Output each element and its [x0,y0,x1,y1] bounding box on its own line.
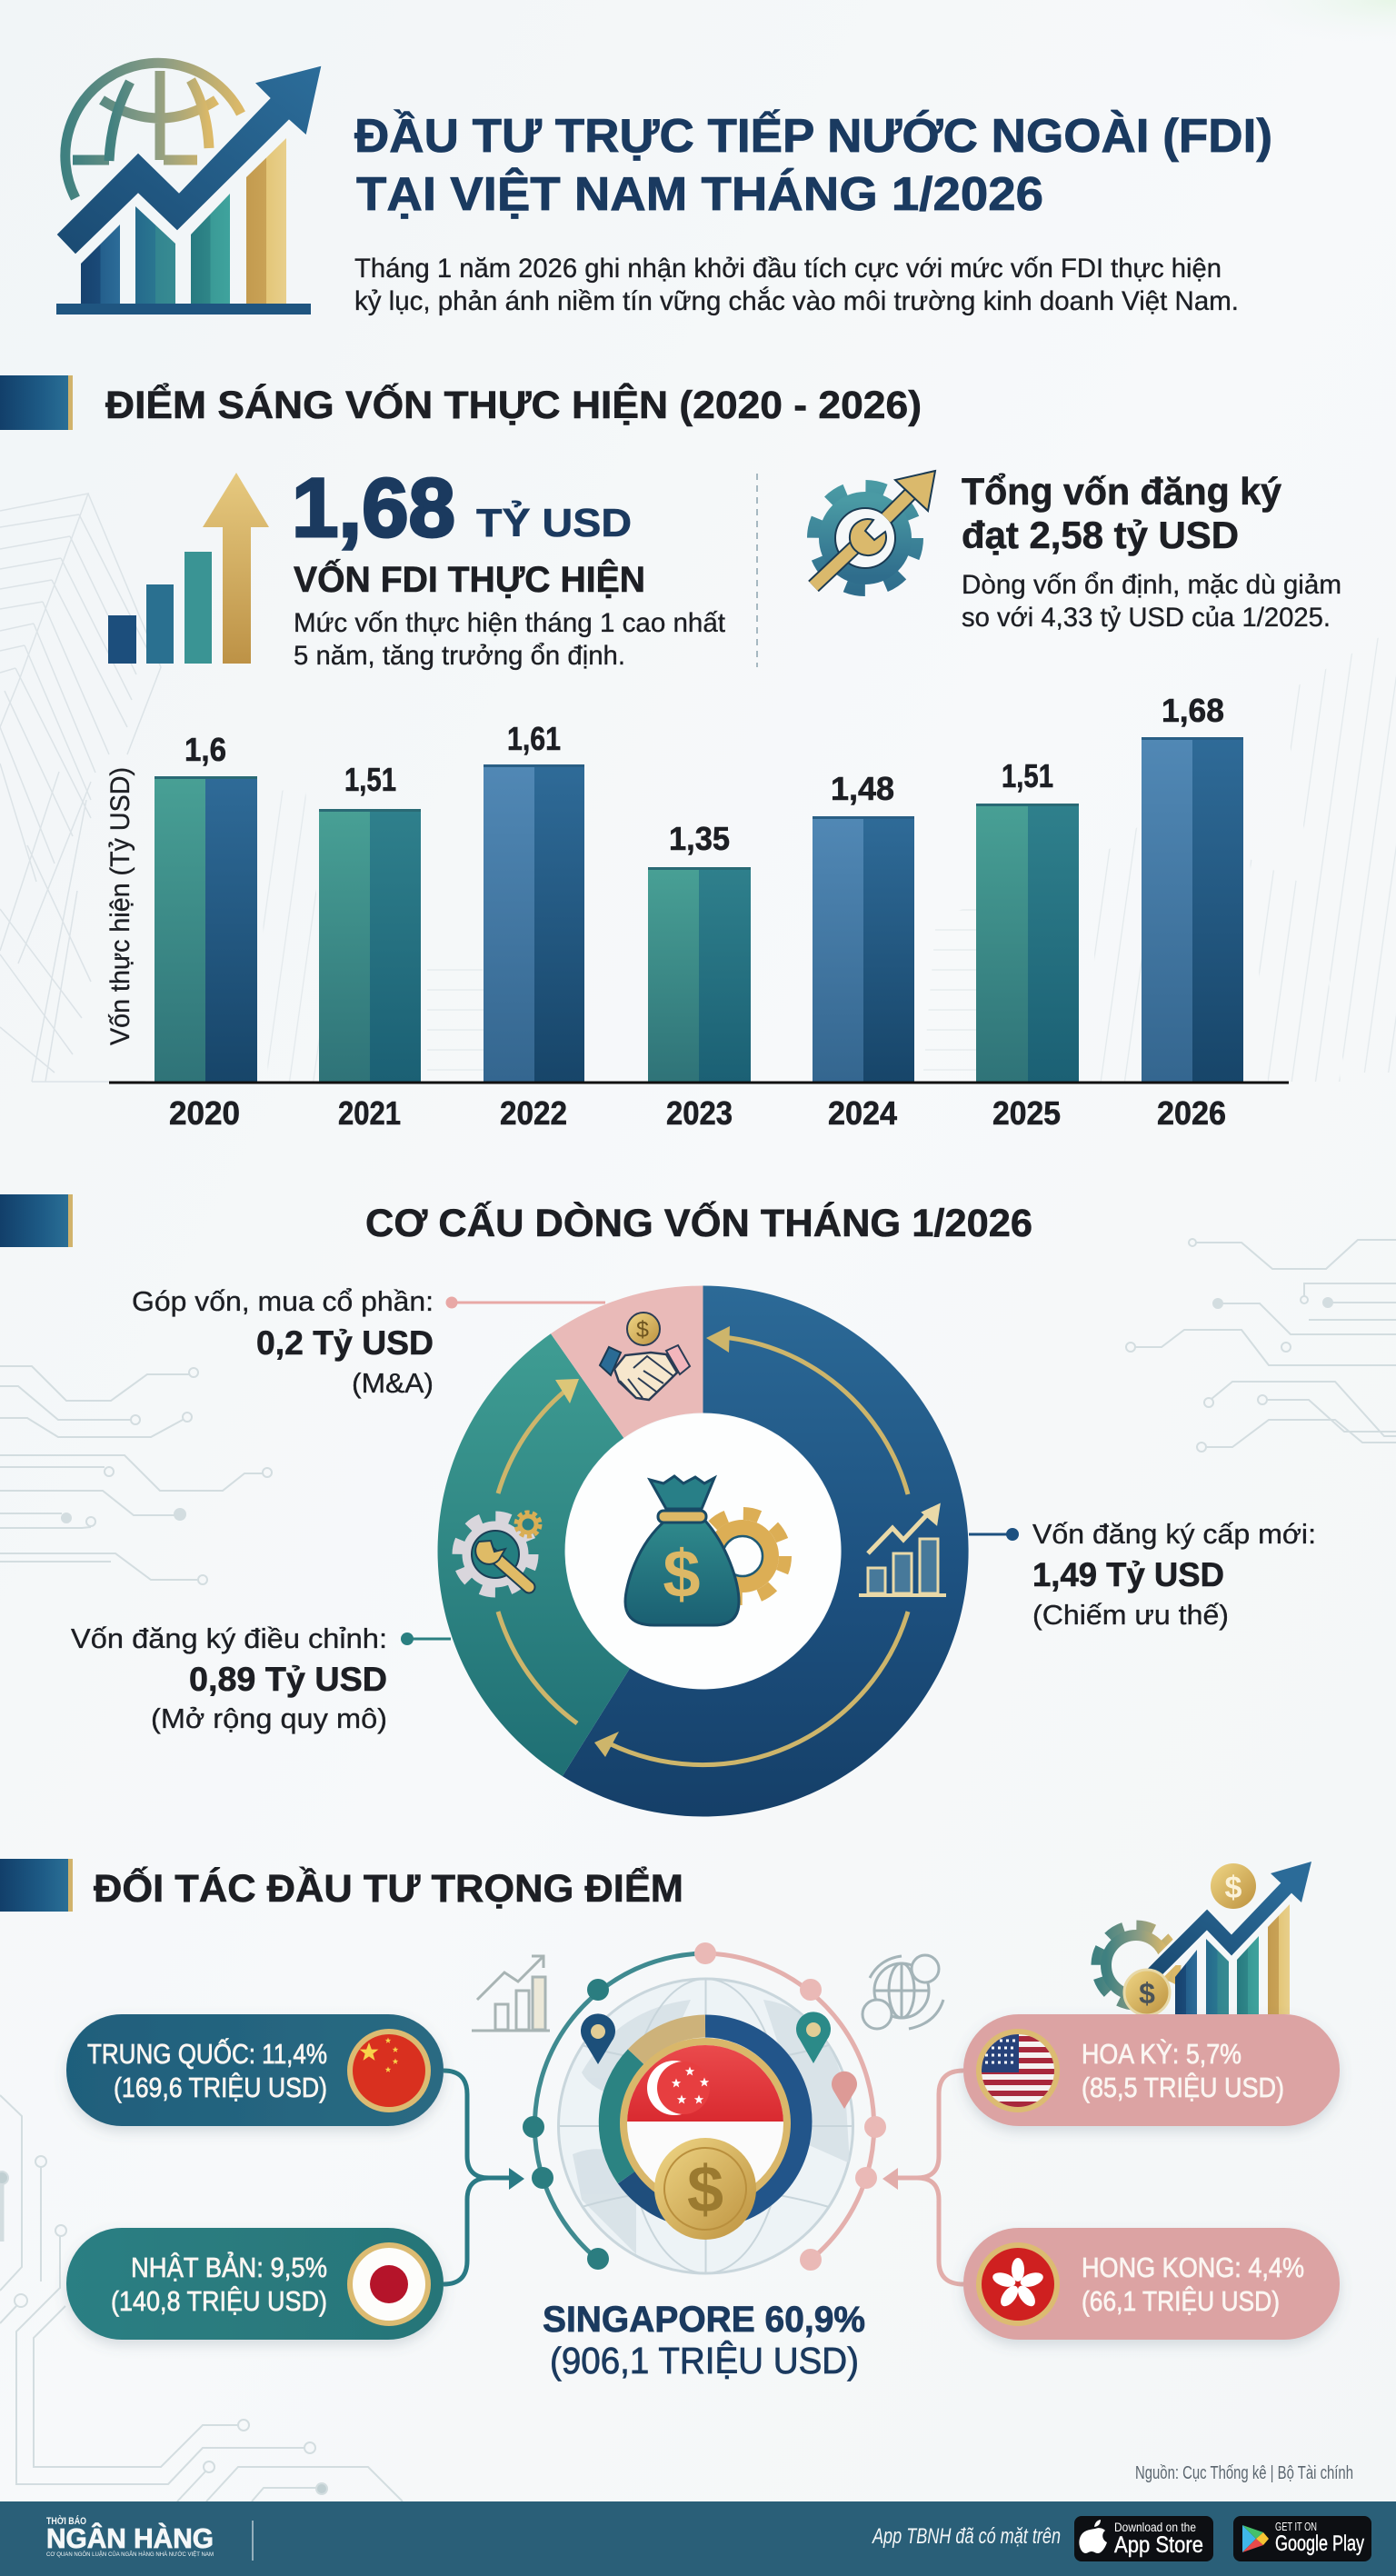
callout: M&A: (M&A) [352,1367,434,1399]
decoration: circuit lines [0,1239,1396,2501]
footer app text: App TBNH đã có mặt trên [871,2524,1061,2549]
icon: growth chart [859,1505,946,1595]
badge: Google Play [1233,2516,1371,2561]
badge: Google Play: GET IT ON [1275,2520,1317,2533]
value labels: 1,48 [831,770,894,807]
segment: adjusted capital [438,1333,630,1776]
heading: section 1: ĐIỂM SÁNG VỐN THỰC HIỆN (2020 - 2026) [105,383,922,427]
partner: Hong Kong [963,2228,1340,2340]
callout: adjusted capital: 0,89 Tỷ USD [189,1661,387,1698]
icon: small globe with coins [863,1955,943,2029]
badge: App Store: Download on the [1114,2520,1196,2534]
kpi: realised capital [292,462,726,671]
section marker 1 [0,375,73,430]
bar 2021 [319,809,421,1083]
value labels: 1,6 [184,731,226,768]
value labels [184,692,1224,857]
callout: new registered capital [969,1518,1316,1631]
kpi: realised capital: 1,68 [292,462,455,554]
badge: Google Play: Google Play [1275,2531,1364,2556]
icon: growth chart with gear and coins: $ [1139,1977,1155,2010]
value labels: 1,35 [669,820,730,857]
intro text: Tháng 1 năm 2026 ghi nhận khởi đầu tích cực với mức vốn FDI thực hiện [354,254,1222,284]
footer bar [0,2501,1396,2576]
corner tint [0,0,1396,364]
footer divider [252,2521,254,2561]
year labels: 2024 [828,1094,897,1132]
year labels: 2022 [500,1094,567,1132]
badge: App Store [1074,2516,1213,2561]
callout: M&A [132,1285,605,1399]
partner: Hong Kong: HONG KONG: 4,4% [1082,2252,1304,2283]
kpi: realised capital: Mức vốn thực hiện tháng 1 cao nhất [294,608,726,638]
x axis [109,1082,1289,1083]
header logo icon [56,63,322,315]
year labels: 2021 [338,1094,401,1132]
donut ring around flag [610,2026,801,2217]
kpi divider [756,474,758,667]
icon: money bag and gear [625,1476,785,1625]
decoration: building line art [0,494,1396,1082]
title [354,109,1272,221]
footer logo: CƠ QUAN NGÔN LUẬN CỦA NGÂN HÀNG NHÀ NƯỚC VIỆT NAM [46,2550,214,2558]
bar 2025 [976,804,1079,1083]
icon: gears and wrench [458,1513,540,1592]
segment: M&A [551,1285,703,1438]
year labels: 2025 [992,1094,1061,1132]
callout: adjusted capital: Vốn đăng ký điều chỉnh: [71,1622,387,1654]
partner: China [66,2014,444,2126]
callout: adjusted capital: (Mở rộng quy mô) [151,1702,387,1734]
partner: United States [963,2014,1340,2126]
icon: small chart [472,1956,550,2031]
value labels: 1,61 [507,720,561,757]
gold coin [654,2138,756,2240]
icon: growth arrow [56,65,322,255]
bar 2026 [1142,737,1243,1083]
bar 2023 [648,867,751,1083]
label: Singapore: SINGAPORE 60,9% [543,2300,865,2340]
callout: new registered capital: 1,49 Tỷ USD [1032,1556,1224,1593]
icon: handshake with coin [600,1313,690,1400]
value labels: 1,68 [1162,692,1224,729]
kpi icon: bars and arrow [108,473,269,664]
flow arrows [498,1326,908,1765]
callout: new registered capital: (Chiếm ưu thế) [1032,1599,1229,1631]
partner: Japan: NHẬT BẢN: 9,5% [131,2252,327,2283]
year labels: 2026 [1157,1094,1226,1132]
value labels: 1,51 [1002,757,1053,794]
value labels: 1,51 [344,761,396,798]
bar 2020 [155,776,257,1083]
connector: left partners [444,2071,524,2284]
partner: Hong Kong: (66,1 TRIỆU USD) [1082,2285,1280,2317]
callout: adjusted capital [71,1622,451,1734]
section marker 2 [0,1194,73,1247]
donut chart: capital structure [438,1285,969,1816]
heading: section 3: ĐỐI TÁC ĐẦU TƯ TRỌNG ĐIỂM [94,1866,683,1911]
map pins [581,2012,857,2109]
kpi: realised capital: VỐN FDI THỰC HIỆN [294,558,645,600]
orbit with nodes [523,1942,886,2271]
partner: Japan: (140,8 TRIỆU USD) [111,2285,327,2317]
icon: gear with wrench and arrow [813,471,935,590]
section marker 3 [0,1859,73,1912]
callout: new registered capital: Vốn đăng ký cấp mới: [1032,1518,1316,1550]
kpi: registered capital: Dòng vốn ổn định, mặc dù giảm [962,570,1341,600]
central globe [558,1979,853,2273]
kpi: realised capital: TỶ USD [476,500,632,545]
intro text: kỷ lục, phản ánh niềm tín vững chắc vào môi trường kinh doanh Việt Nam. [354,286,1239,316]
y axis label: Vốn thực hiện (Tỷ USD) [105,767,135,1045]
icon: growth chart with gear and coins: $ [1225,1871,1242,1905]
year labels [169,1094,1226,1132]
Singapore flag [620,2038,791,2209]
icon: money bag and gear: $ [663,1536,701,1612]
bar 2024 [813,816,914,1083]
partner: China: (169,6 TRIỆU USD) [114,2072,327,2103]
year labels: 2020 [169,1094,240,1132]
label: Singapore [543,2300,865,2381]
icon: globe [65,63,241,198]
footer logo: NGÂN HÀNG [46,2521,214,2554]
year labels: 2023 [666,1094,733,1132]
intro text [354,254,1239,316]
icon: rising bars [56,138,311,315]
callout: M&A: 0,2 Tỷ USD [256,1324,434,1362]
title: TẠI VIỆT NAM THÁNG 1/2026 [356,167,1043,221]
connector: right partners [882,2071,963,2284]
bar 2022 [484,764,584,1083]
footer logo: THỜI BÁO [46,2515,86,2527]
kpi: realised capital: 5 năm, tăng trưởng ổn định. [294,641,625,671]
kpi: registered capital: đạt 2,58 tỷ USD [962,514,1239,556]
gold coin: $ [687,2153,723,2226]
kpi: registered capital: so với 4,33 tỷ USD của 1/2025. [962,603,1331,633]
kpi: registered capital [962,470,1341,633]
partner: United States: (85,5 TRIỆU USD) [1082,2072,1284,2103]
icon: growth chart with gear and coins [1098,1862,1311,2015]
callout: M&A: Góp vốn, mua cổ phần: [132,1285,434,1317]
partner: China: TRUNG QUỐC: 11,4% [87,2037,327,2070]
kpi: registered capital: Tổng vốn đăng ký [962,470,1282,513]
label: Singapore: (906,1 TRIỆU USD) [550,2340,859,2381]
center hole [565,1414,840,1689]
bar chart: realised FDI 2020-2026 [105,692,1289,1132]
icon: handshake with coin: $ [636,1317,649,1343]
partner: Japan [66,2228,444,2340]
title: ĐẦU TƯ TRỰC TIẾP NƯỚC NGOÀI (FDI) [354,109,1272,163]
partner: United States: HOA KỲ: 5,7% [1082,2038,1241,2070]
heading: section 2: CƠ CẤU DÒNG VỐN THÁNG 1/2026 [365,1201,1032,1245]
badge: App Store: App Store [1114,2532,1203,2558]
segment: new registered capital [563,1285,969,1816]
